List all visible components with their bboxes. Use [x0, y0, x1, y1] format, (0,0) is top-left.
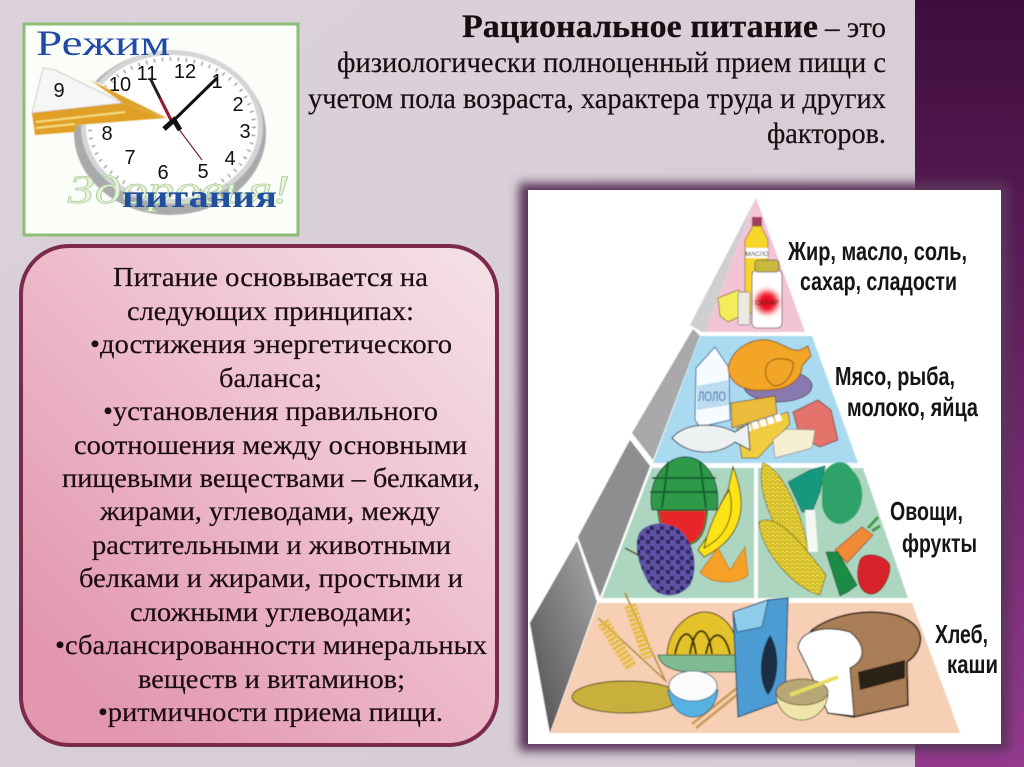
milk carton: ЛОЛО [698, 388, 726, 404]
butter block [718, 290, 745, 322]
bananas [698, 467, 741, 557]
picture shadow [519, 183, 1009, 751]
label: bread: Хлеб, [935, 619, 988, 649]
leafy greens [822, 462, 862, 524]
clock numerals: 2 [232, 94, 244, 116]
cucumber [826, 552, 857, 596]
pyramid labels [787, 236, 998, 679]
pyramid side faces [530, 198, 756, 733]
label: fruit: фрукты [902, 528, 977, 558]
image caption green script: Здоровья! [68, 167, 290, 212]
image caption bottom: питания [122, 178, 277, 214]
clock numerals: 11 [137, 63, 157, 85]
red pepper [858, 555, 890, 594]
cereal box [733, 598, 788, 717]
heading and definition [308, 9, 886, 150]
tier left background [602, 468, 754, 598]
clock face [60, 50, 266, 215]
tier 3: vegetables and fruit [602, 457, 908, 598]
tier background [653, 336, 858, 463]
tier 1: fats and sweets [705, 198, 805, 332]
tier background [705, 198, 805, 332]
clock hands [150, 78, 217, 160]
orange slices [700, 547, 748, 582]
clock numerals: 12 [174, 61, 196, 83]
wheat stalks [598, 593, 667, 682]
bread loaf [798, 612, 920, 717]
plate [744, 370, 812, 402]
spoon [790, 677, 838, 695]
label: milk: молоко, яйца [847, 392, 978, 422]
clock numerals: 8 [101, 123, 113, 145]
meat [793, 400, 838, 447]
leek [788, 466, 825, 552]
tier 4: bread and grains [550, 593, 960, 733]
label: porridge: каши [947, 649, 998, 679]
porridge bowl [776, 679, 828, 720]
principles text: баланса; [219, 362, 322, 393]
principles text: жирами, углеводами, между [99, 495, 440, 526]
cake slice cut from clock [32, 68, 167, 135]
carrot [835, 527, 873, 563]
clock numerals: 6 [157, 162, 169, 184]
noodles [667, 612, 738, 655]
principles text: веществ и витаминов; [138, 663, 405, 694]
carrot greens [868, 517, 880, 531]
label: vegetables: Овощи, [890, 496, 963, 526]
clock numerals [101, 61, 251, 184]
principles text: белками и жирами, простыми и [79, 562, 463, 593]
salt shaker [738, 292, 750, 325]
tofu block [773, 429, 815, 458]
tier background [550, 603, 960, 733]
chopsticks [692, 688, 738, 728]
panel box [21, 246, 497, 745]
oil bottle: МАСЛО [745, 251, 769, 258]
principles text: соотношения между основными [74, 429, 467, 460]
cheese [731, 396, 777, 428]
egg tray [737, 412, 790, 458]
watermelon [650, 457, 718, 545]
fish [672, 424, 750, 452]
corn cob lower [759, 520, 826, 595]
milk carton [695, 347, 730, 427]
clock image: meal schedule [24, 23, 298, 235]
principles text [55, 261, 487, 727]
clock numerals: 10 [109, 74, 131, 96]
sugar jar: САХАР [755, 300, 779, 307]
clock numerals: 5 [197, 161, 209, 183]
right purple band [915, 0, 1024, 767]
clock numerals: 7 [124, 147, 136, 169]
clock numerals: 4 [224, 148, 236, 170]
label: fats: Жир, масло, соль, [787, 236, 967, 266]
image caption top: Режим [36, 23, 170, 63]
definition line 1: физиологически полноценный прием пищи с [337, 47, 886, 79]
grapes [625, 524, 695, 596]
definition line 2: учетом пола возраста, характера труда и других [308, 83, 886, 115]
baguette [572, 681, 680, 713]
numeral 9 on slice: 9 [53, 80, 65, 102]
principles text: •достижения энергетического [90, 328, 452, 359]
heading line: Рациональное питание [462, 9, 818, 45]
heading dash: – это [824, 12, 886, 44]
image frame [24, 24, 298, 235]
clock numerals: 1 [211, 71, 223, 93]
label: sweets: сахар, сладости [800, 266, 957, 296]
principles text: •сбалансированности минеральных [55, 629, 487, 660]
roast chicken [728, 340, 811, 390]
panel: principles [21, 246, 497, 745]
tier 2: meat, fish, milk, eggs [653, 336, 858, 463]
principles text: сложными углеводами; [130, 596, 412, 627]
principles text: следующих принципах: [127, 295, 414, 326]
principles text: •установления правильного [103, 395, 438, 426]
corn cob upper [761, 463, 808, 560]
tier right background [758, 468, 908, 598]
principles text: растительными и животными [92, 529, 451, 560]
clock numerals: 3 [239, 121, 251, 143]
principles text: Питание основывается на [113, 261, 428, 292]
principles text: •ритмичности приема пищи. [98, 696, 443, 727]
green plate [658, 655, 738, 672]
picture background [528, 190, 1001, 744]
rice bowl [668, 671, 718, 717]
definition line 3: факторов. [767, 118, 886, 150]
principles text: пищевыми веществами – белками, [62, 462, 480, 493]
label: meat: Мясо, рыба, [835, 361, 955, 391]
food pyramid image [528, 190, 1001, 744]
